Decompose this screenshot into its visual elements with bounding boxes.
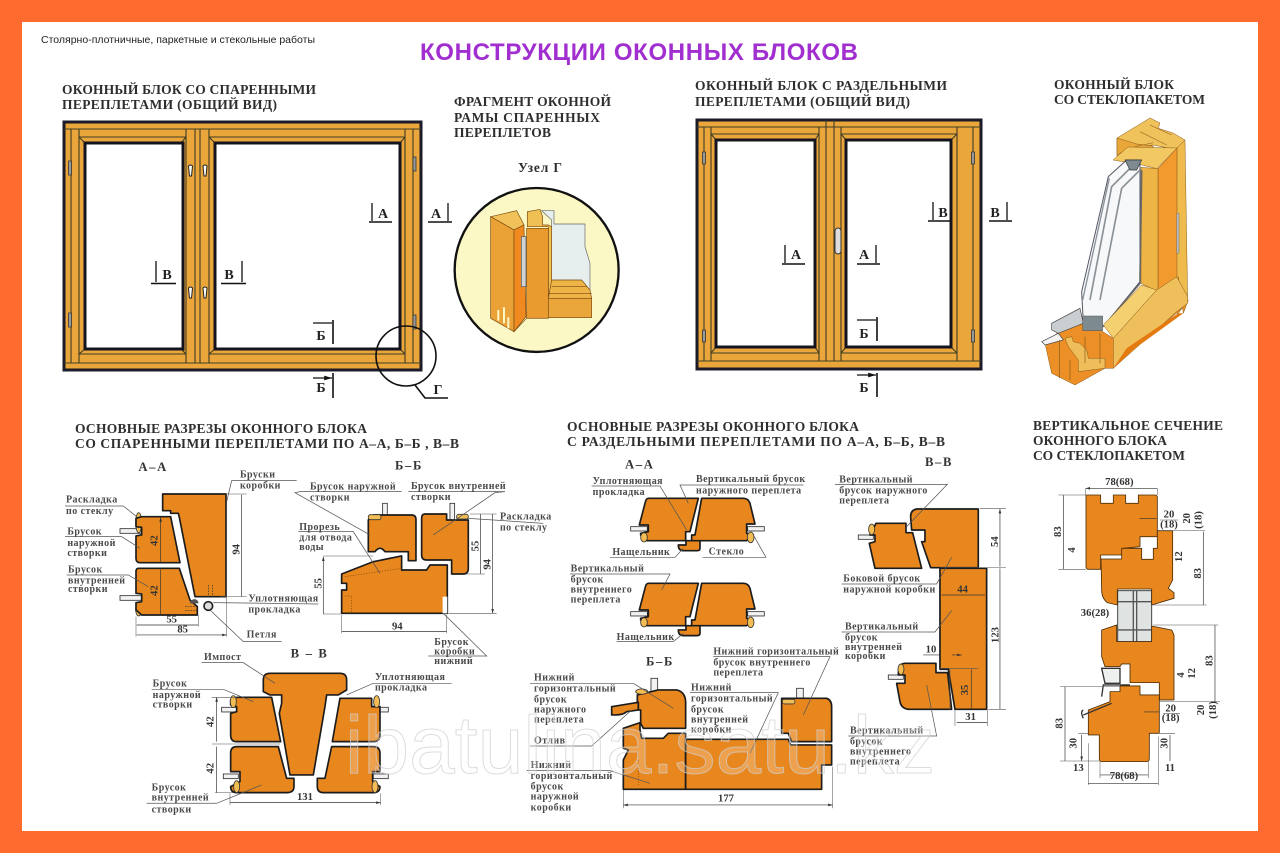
section A-A: Бруски — [240, 469, 275, 480]
section B-B: Брусок внутренней — [411, 481, 506, 492]
section V-V: 131 — [297, 792, 313, 803]
section V-V: брусок наружного — [839, 485, 928, 496]
dimensions: 78(68) — [1105, 477, 1134, 488]
section V-V — [147, 646, 452, 815]
section A-A: Брусок — [67, 526, 102, 537]
heading: РАМЫ СПАРЕННЫХ — [454, 110, 600, 125]
section marks: Б — [859, 381, 869, 396]
section B-B: для отвода — [299, 533, 352, 544]
section B-B: створки — [310, 493, 350, 504]
section V-V: переплета — [850, 756, 900, 767]
section V-V: брусок — [850, 736, 883, 747]
section V-V: 35 — [960, 685, 971, 695]
section A-A: 55 — [166, 615, 177, 626]
section V-V: Боковой брусок — [843, 573, 921, 584]
section V-V: Уплотняющая — [375, 672, 445, 683]
section V-V: 10 — [926, 644, 936, 655]
section A-A: по стеклу — [66, 506, 114, 517]
section B-B: воды — [299, 542, 324, 553]
section marks: В — [938, 206, 948, 221]
bottom frame — [1088, 686, 1159, 762]
heading: ОКОННОГО БЛОКА — [1033, 433, 1167, 448]
section marks: Б — [316, 329, 326, 344]
section B-B: наружного — [534, 705, 586, 716]
section B-B — [527, 646, 839, 814]
section A-A: Брусок — [68, 565, 103, 576]
weather strip — [1102, 668, 1120, 683]
section B-B: коробки — [434, 646, 475, 657]
dimensions — [1053, 477, 1220, 785]
section A-A: створки — [68, 584, 108, 595]
section B-B: горизонтальный — [531, 771, 613, 782]
detail circle Г — [376, 326, 448, 398]
section B-B: Нижний — [534, 673, 575, 684]
panel: sections of separate-sash window — [527, 419, 1006, 814]
top sash — [1101, 531, 1174, 605]
lower sash — [1102, 625, 1174, 700]
section marks — [782, 202, 1012, 397]
section V-V: Вертикальный — [839, 474, 913, 485]
section V-V: наружной коробки — [843, 584, 936, 595]
section B-B: внутренней — [691, 714, 748, 725]
section marks: А — [791, 248, 802, 263]
glass unit — [1118, 591, 1152, 642]
section V-V: Брусок — [152, 783, 186, 794]
section A-A: 94 — [231, 543, 242, 555]
section A-A: коробки — [240, 480, 281, 491]
section V-V: брусок — [845, 633, 878, 644]
heading — [75, 421, 459, 451]
section A-A upper and lower: прокладка — [593, 487, 645, 498]
section marks: Б — [859, 327, 869, 342]
section marks: Б — [316, 381, 326, 396]
drip profile — [1082, 685, 1130, 718]
section B-B: коробки — [691, 724, 732, 735]
section V-V: внутреннего — [850, 746, 911, 757]
section V-V: Импост — [204, 652, 241, 663]
section A-A upper and lower — [570, 457, 806, 643]
dimensions: 36(28) — [1081, 608, 1110, 619]
dimensions: 78(68) — [1110, 771, 1139, 782]
section A-A upper and lower: переплета — [571, 595, 621, 606]
dimensions: (18) — [1162, 713, 1180, 724]
section B-B: коробки — [531, 803, 572, 814]
panel: window with paired sashes — [62, 82, 452, 398]
section marks: В — [162, 268, 172, 283]
section V-V: В–В — [925, 455, 953, 469]
panel: sections of paired-sash window — [65, 421, 552, 815]
section B-B: брусок — [534, 694, 567, 705]
section B-B: брусок внутреннего — [713, 658, 811, 669]
section marks: А — [378, 207, 389, 222]
section V-V: внутренней — [152, 793, 209, 804]
panel: window with separate sashes — [695, 78, 1012, 397]
heading: ПЕРЕПЛЕТАМИ (ОБЩИЙ ВИД) — [62, 97, 277, 112]
section marks: А — [859, 248, 870, 263]
section A-A — [65, 460, 319, 642]
section A-A upper and lower: Нащельник — [617, 632, 675, 643]
section V-V: 54 — [990, 536, 1001, 547]
section A-A upper and lower: внутреннего — [571, 585, 632, 596]
dimensions: (18) — [1194, 511, 1205, 529]
section V-V: 42 — [205, 763, 216, 774]
section B-B: Отлив — [534, 735, 566, 746]
section B-B: наружной — [531, 791, 579, 802]
section A-A upper and lower: Вертикальный — [571, 563, 644, 574]
section B-B: нижний — [434, 656, 473, 667]
section B-B — [295, 458, 552, 667]
top caption: Столярно-плотничные, паркетные и стекольные работы — [41, 34, 315, 46]
section A-A: 42 — [149, 535, 160, 546]
section V-V: 123 — [991, 627, 1002, 643]
heading — [454, 94, 611, 175]
heading: ПЕРЕПЛЕТОВ — [454, 125, 551, 140]
section V-V: В – В — [291, 646, 329, 660]
dimensions: (18) — [1160, 519, 1178, 530]
section A-A upper and lower: Уплотняющая — [593, 476, 663, 487]
heading: С РАЗДЕЛЬНЫМИ ПЕРЕПЛЕТАМИ ПО А–А, Б–Б, В–В — [567, 434, 945, 449]
dimensions: 83 — [1054, 718, 1065, 729]
heading: ОКОННЫЙ БЛОК — [1054, 77, 1174, 92]
section B-B: Нижний — [531, 760, 571, 771]
section B-B: Б–Б — [646, 655, 674, 669]
section V-V: внутренней — [845, 642, 902, 653]
section A-A: Раскладка — [66, 495, 118, 506]
window drawing — [64, 122, 421, 370]
section marks: В — [224, 268, 234, 283]
section V-V: Вертикальный — [845, 621, 919, 632]
section marks: А — [431, 207, 442, 222]
panel: vertical section with glass unit — [1033, 418, 1223, 785]
watermark: ibatulina.satu.kz — [345, 700, 935, 791]
section B-B: Брусок — [434, 637, 469, 648]
section B-B: переплета — [713, 668, 764, 679]
heading: ФРАГМЕНТ ОКОННОЙ — [454, 94, 611, 109]
section A-A upper and lower: наружного переплета — [696, 485, 802, 496]
dimensions: (18) — [1208, 701, 1219, 719]
heading — [695, 78, 947, 109]
dimensions: 12 — [1174, 551, 1185, 562]
section B-B: Раскладка — [500, 511, 552, 522]
dimensions: 30 — [1160, 738, 1171, 749]
section A-A: 42 — [149, 585, 160, 596]
section B-B: Брусок наружной — [310, 481, 396, 492]
heading: СО СТЕКЛОПАКЕТОМ — [1054, 92, 1205, 107]
panel: fragment node Г — [454, 94, 619, 352]
section marks: В — [990, 206, 1000, 221]
dimensions: 83 — [1205, 655, 1216, 666]
dimensions: 20 — [1164, 510, 1174, 521]
section V-V: переплета — [839, 495, 889, 506]
section A-A: Петля — [247, 629, 277, 640]
section V-V: створки — [152, 804, 192, 815]
section A-A: А–А — [138, 460, 168, 474]
heading: ПЕРЕПЛЕТАМИ (ОБЩИЙ ВИД) — [695, 94, 910, 109]
section A-A: Уплотняющая — [248, 593, 319, 604]
dimensions: 83 — [1193, 568, 1204, 579]
top frame — [1086, 495, 1157, 569]
section V-V: створки — [153, 699, 193, 710]
section A-A: 85 — [177, 625, 188, 636]
section B-B: Нижний — [691, 683, 732, 694]
section V-V: Вертикальный — [850, 725, 924, 736]
3D cutaway — [1042, 118, 1188, 385]
section A-A upper and lower: Вертикальный брусок — [696, 474, 806, 485]
heading: ОКОННЫЙ БЛОК С РАЗДЕЛЬНЫМИ — [695, 78, 947, 93]
dimensions: 20 — [1165, 704, 1176, 715]
window drawing — [697, 120, 981, 369]
heading — [1054, 77, 1205, 107]
section B-B: брусок — [691, 704, 724, 715]
section B-B: по стеклу — [500, 523, 548, 534]
section A-A: наружной — [67, 538, 116, 549]
section marks — [151, 203, 452, 398]
section A-A upper and lower: Стекло — [709, 547, 744, 558]
heading — [62, 82, 316, 112]
section A-A: створки — [67, 548, 107, 559]
section B-B: 55 — [471, 541, 482, 551]
heading: СО СТЕКЛОПАКЕТОМ — [1033, 448, 1185, 463]
dimensions: 12 — [1187, 668, 1198, 679]
dimensions: 30 — [1069, 738, 1080, 749]
section V-V: прокладка — [375, 683, 427, 694]
section A-A: прокладка — [248, 605, 301, 616]
heading — [1033, 418, 1223, 463]
section B-B: горизонтальный — [691, 694, 773, 705]
section B-B: Нижний горизонтальный — [713, 646, 839, 657]
heading: ВЕРТИКАЛЬНОЕ СЕЧЕНИЕ — [1033, 418, 1223, 433]
dimensions: 11 — [1165, 763, 1175, 774]
section B-B: 177 — [718, 793, 735, 804]
panel: block with glass unit 3D — [1042, 77, 1205, 385]
heading: ОКОННЫЙ БЛОК СО СПАРЕННЫМИ — [62, 82, 316, 97]
section V-V: 44 — [957, 585, 969, 596]
heading: ОСНОВНЫЕ РАЗРЕЗЫ ОКОННОГО БЛОКА — [567, 419, 859, 434]
dimensions: 83 — [1053, 526, 1064, 537]
section V-V: Брусок — [153, 679, 187, 690]
section B-B: 94 — [392, 621, 403, 632]
section A-A upper and lower: брусок — [571, 575, 604, 586]
heading: СО СПАРЕННЫМИ ПЕРЕПЛЕТАМИ ПО А–А, Б–Б , В–В — [75, 436, 459, 451]
title: КОНСТРУКЦИИ ОКОННЫХ БЛОКОВ — [420, 39, 858, 66]
dimensions: 13 — [1073, 763, 1084, 774]
section V-V: 31 — [965, 712, 976, 723]
dimensions: 4 — [1067, 547, 1078, 553]
section V-V — [835, 455, 1006, 767]
section B-B: горизонтальный — [534, 684, 616, 695]
section V-V: наружной — [153, 690, 201, 701]
heading — [567, 419, 945, 449]
detail circle Г: Г — [434, 383, 443, 398]
section V-V: 42 — [205, 716, 216, 727]
section B-B: 94 — [483, 558, 494, 570]
dimensions: 20 — [1182, 513, 1193, 524]
section B-B: Прорезь — [299, 522, 340, 533]
section B-B: 55 — [313, 578, 324, 589]
heading: ОСНОВНЫЕ РАЗРЕЗЫ ОКОННОГО БЛОКА — [75, 421, 367, 436]
section B-B: переплета — [534, 715, 584, 726]
section V-V: коробки — [845, 651, 886, 662]
section B-B: брусок — [531, 781, 564, 792]
dimensions: 4 — [1176, 672, 1187, 678]
section A-A upper and lower: А–А — [625, 457, 655, 471]
section B-B: Б–Б — [395, 458, 423, 472]
dimensions: 20 — [1196, 705, 1207, 715]
section B-B: створки — [411, 492, 451, 503]
magnified circle — [455, 188, 619, 352]
section A-A: внутренней — [68, 575, 126, 586]
heading: Узел Г — [518, 160, 562, 175]
section A-A upper and lower: Нащельник — [612, 547, 670, 558]
